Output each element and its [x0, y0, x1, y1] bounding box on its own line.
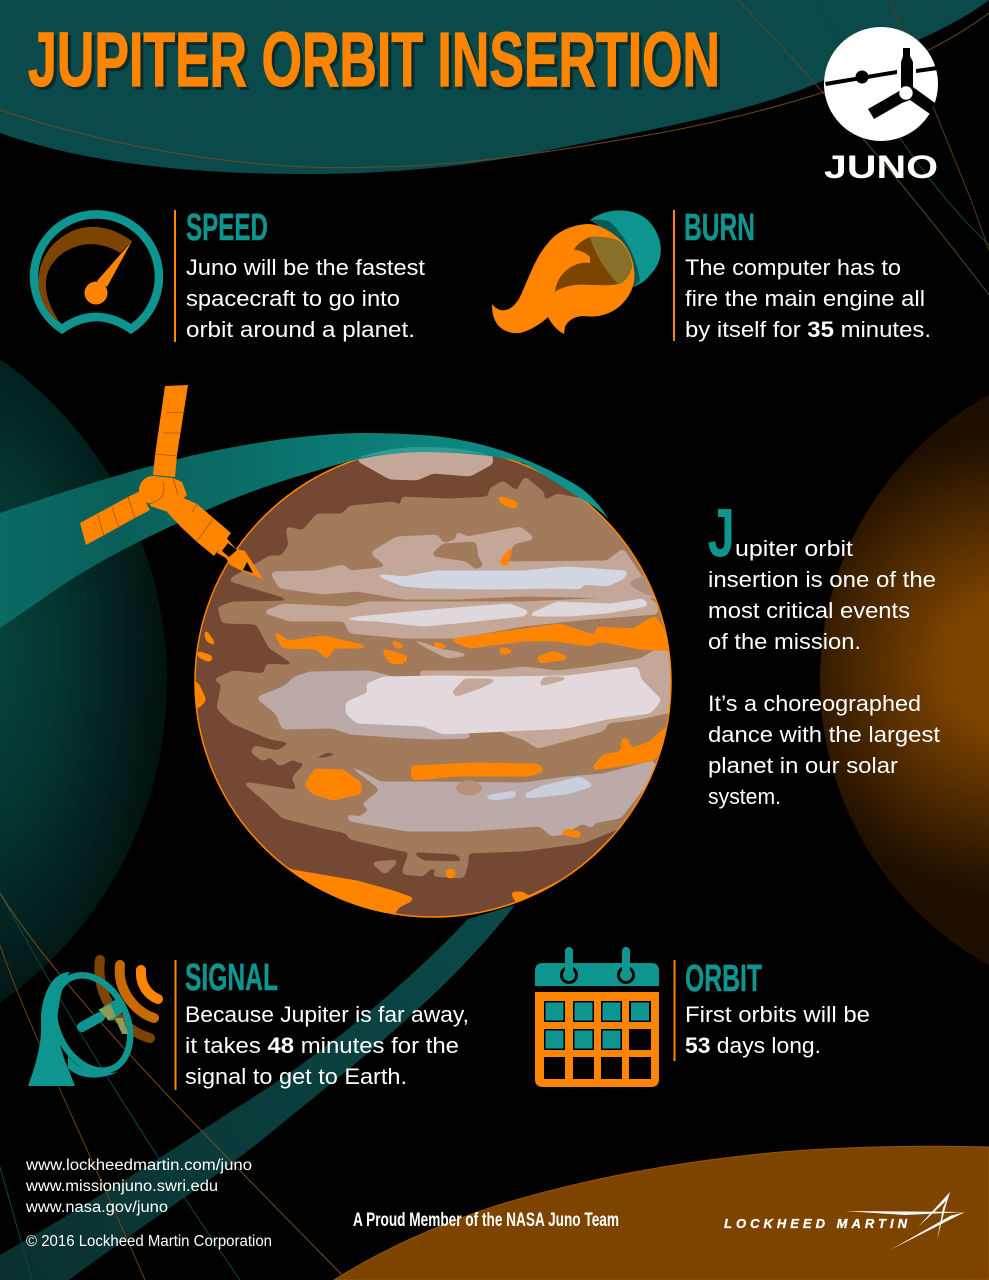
speed text: spacecraft to go into [186, 286, 400, 311]
heading: burn: BURN [684, 207, 755, 249]
footer links: www.nasa.gov/juno [25, 1199, 168, 1216]
mid brown band [215, 478, 680, 877]
burn text [685, 255, 931, 342]
speed text: Juno will be the fastest [186, 255, 426, 280]
drop cap J: J [709, 497, 734, 569]
panel: signal [28, 957, 469, 1090]
grey cloud [258, 672, 470, 738]
right orange planet [820, 355, 989, 1005]
team credit: A Proud Member of the NASA Juno Team [353, 1210, 619, 1231]
intro text: upiter orbit [735, 536, 854, 561]
heading: speed: SPEED [186, 207, 268, 249]
light band second [265, 597, 657, 637]
lockheed martin logo: LOCKHEED MARTIN [724, 1216, 908, 1231]
speed text: orbit around a planet. [186, 317, 415, 342]
icon: satellite dish [28, 960, 158, 1086]
icon: speedometer [34, 214, 159, 329]
light cloud cap [358, 452, 493, 480]
left dark planet [0, 287, 167, 1075]
intro text: of the mission. [708, 629, 861, 654]
icon: juno spacecraft [80, 385, 263, 579]
light band upper [272, 528, 657, 598]
top teal arc [0, 0, 989, 174]
icon: rocket flame [492, 210, 661, 334]
jupiter planet [190, 445, 680, 930]
oval storm [456, 780, 482, 796]
blue lower clouds [485, 792, 515, 799]
upper teal orbit band [0, 433, 609, 628]
intro text: It’s a choreographed [708, 691, 921, 716]
bottom brown planet [334, 1146, 989, 1280]
icon: calendar [535, 947, 659, 1087]
footer links: www.missionjuno.swri.edu [25, 1178, 218, 1195]
orbit text: First orbits will be [685, 1002, 870, 1027]
intro text: planet in our solar [708, 753, 899, 778]
panel: orbit [535, 947, 870, 1087]
burn text: fire the main engine all [685, 286, 925, 311]
heading: signal: SIGNAL [185, 957, 278, 999]
heading: orbit: ORBIT [685, 958, 762, 1000]
signal text [185, 1002, 469, 1089]
white cloud [347, 668, 660, 733]
panel: speed [34, 207, 426, 342]
signal text: it takes 48 minutes for the [185, 1033, 459, 1058]
blue band upper [377, 568, 627, 588]
intro text [708, 497, 941, 809]
footer links: © 2016 Lockheed Martin Corporation [26, 1233, 272, 1250]
intro text: dance with the largest [708, 722, 941, 747]
intro text: insertion is one of the [708, 567, 936, 592]
orbit text: 53 days long. [685, 1033, 821, 1058]
intro text: system. [708, 784, 781, 809]
lower teal orbit band [0, 905, 515, 1280]
orange storm: small centre [383, 650, 407, 663]
orange right edge [593, 728, 666, 770]
juno wordmark: JUNO [824, 149, 938, 185]
speed text [186, 255, 426, 342]
burn text: by itself for 35 minutes. [685, 317, 931, 342]
signal text: Because Jupiter is far away, [185, 1002, 469, 1027]
footer links: www.lockheedmartin.com/juno [25, 1157, 252, 1174]
orange storm: upper right [452, 617, 675, 650]
lockheed martin logo [724, 1192, 965, 1250]
orange lower crescent [288, 867, 412, 914]
orange storm: upper left [275, 632, 367, 658]
intro text: most critical events [708, 598, 910, 623]
panel: burn [492, 207, 931, 342]
grey lower band [348, 762, 655, 835]
icon: Juno logo [824, 27, 938, 185]
footer links [25, 1157, 272, 1250]
orange bar [412, 764, 543, 779]
great red spot [306, 770, 360, 799]
orbit text [685, 1002, 870, 1058]
signal text: signal to get to Earth. [185, 1064, 407, 1089]
light band centre right [420, 650, 670, 748]
burn text: The computer has to [685, 255, 901, 280]
white band second [345, 605, 528, 625]
